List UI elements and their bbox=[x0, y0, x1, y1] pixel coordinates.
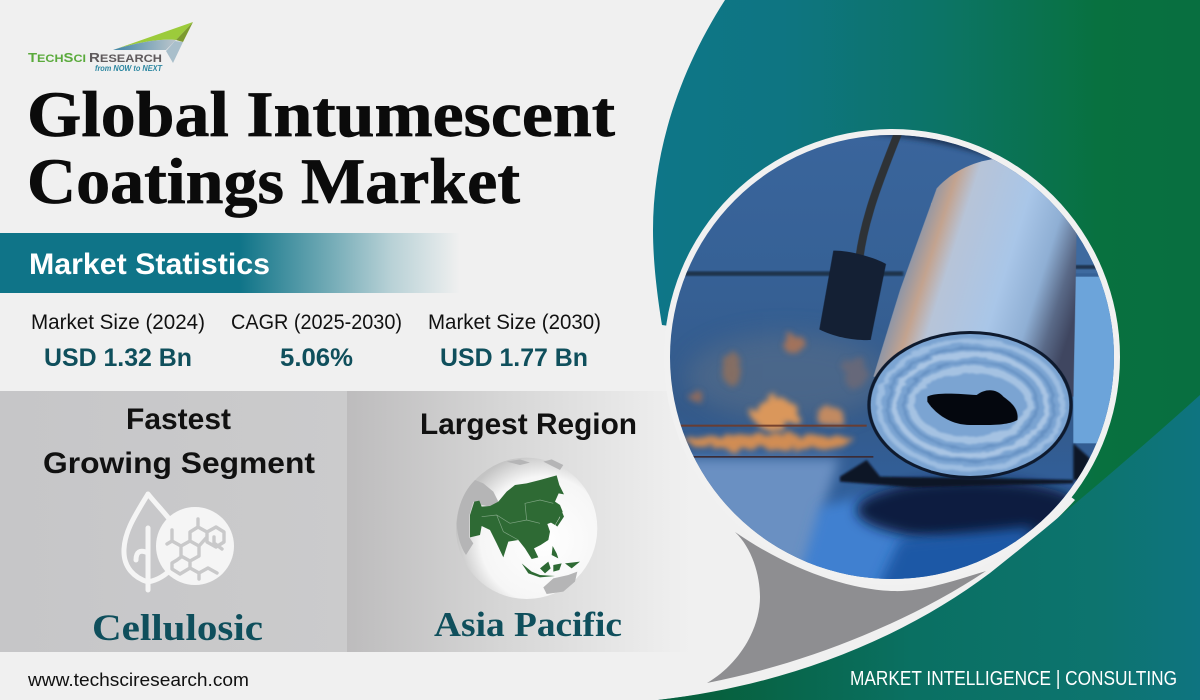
heading: fastest growing segment: Fastest bbox=[126, 403, 231, 436]
banner: market statistics bbox=[0, 233, 460, 293]
stat: market size 2030 bbox=[428, 310, 601, 372]
title: Coatings Market bbox=[27, 146, 520, 218]
stat: market size 2030: USD 1.77 Bn bbox=[440, 344, 588, 372]
banner: market statistics: Market Statistics bbox=[29, 248, 270, 281]
label: Asia Pacific: Asia Pacific bbox=[434, 605, 622, 644]
heading: fastest growing segment: Growing Segment bbox=[43, 447, 315, 480]
logo: TechSci Research: from NOW to NEXT bbox=[95, 64, 163, 73]
stat: CAGR bbox=[231, 310, 402, 372]
background shape: lower right teal bbox=[658, 395, 1200, 700]
stat: market size 2024: Market Size (2024) bbox=[31, 310, 205, 334]
logo: TechSci Research bbox=[28, 22, 193, 73]
stat: CAGR: CAGR (2025-2030) bbox=[231, 310, 402, 334]
roll core hole bbox=[927, 390, 1018, 425]
logo: TechSci Research: TECH SCI bbox=[28, 50, 86, 65]
background shape: teal to green swoosh bbox=[653, 0, 1200, 700]
photo floor bbox=[670, 135, 1114, 579]
stat: market size 2024: USD 1.32 Bn bbox=[44, 344, 192, 372]
stat: market size 2024 bbox=[31, 310, 205, 372]
label: Cellulosic: Cellulosic bbox=[92, 608, 263, 649]
panel: largest region bbox=[347, 391, 692, 652]
flames bbox=[683, 334, 870, 450]
heading: largest region: Largest Region bbox=[420, 408, 637, 441]
stat: market size 2030: Market Size (2030) bbox=[428, 310, 601, 334]
photo circle: burner and membrane roll bbox=[660, 129, 1130, 597]
icon: globe highlighting Asia bbox=[456, 458, 597, 599]
membrane roll bbox=[867, 158, 1077, 479]
title: Global Intumescent bbox=[27, 79, 615, 151]
panel: fastest growing segment bbox=[0, 391, 347, 652]
logo: TechSci Research: RESEARCH bbox=[89, 50, 162, 65]
grey curl shape bbox=[707, 532, 986, 683]
stat: CAGR: 5.06% bbox=[280, 344, 353, 372]
footer strip: www.techsciresearch.com bbox=[27, 670, 249, 690]
icon: leaf and molecule bbox=[124, 494, 234, 590]
burner bbox=[819, 130, 899, 340]
